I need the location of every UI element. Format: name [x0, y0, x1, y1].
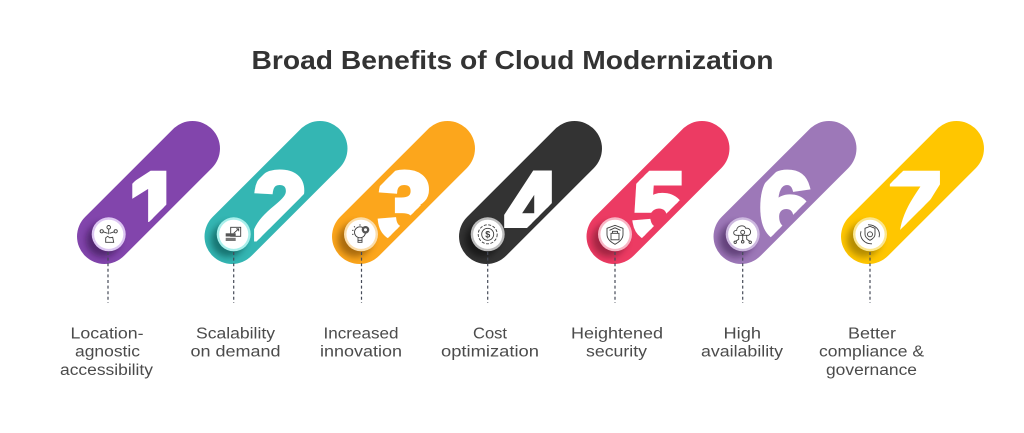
label 6 [701, 326, 783, 361]
icon: light bulb with gear [344, 217, 378, 251]
icon: cloud network [726, 217, 760, 251]
label 4: optimization [441, 344, 539, 361]
panel: 5 heightened security [572, 121, 730, 360]
label 1 [60, 326, 153, 379]
pill shadow 2 [211, 223, 245, 257]
label 1: agnostic [75, 344, 140, 361]
panel: 1 location-agnostic accessibility [60, 121, 220, 378]
panel: 2 scalability on demand [191, 121, 348, 356]
connector 5 [614, 252, 616, 303]
number 1: 1 [128, 153, 182, 260]
icon: dollar gear: $ [485, 230, 490, 240]
panel: 4 cost optimization [442, 121, 602, 360]
label 2: on demand [190, 344, 280, 361]
label 6: High [724, 326, 761, 342]
number 4: 4 [505, 153, 559, 260]
label 1: Location- [70, 326, 144, 342]
pill shadow 3 [338, 223, 372, 257]
pill 5 [575, 110, 741, 275]
title: Broad Benefits of Cloud Modernization [252, 45, 774, 75]
pill shadow 6 [719, 223, 753, 257]
connector 6 [742, 252, 744, 303]
connector 4 [487, 252, 489, 303]
label 2 [190, 326, 280, 361]
pill 6 [702, 110, 868, 275]
pill shadow 1 [86, 223, 120, 257]
icon: target shield [853, 217, 887, 251]
pill shadow 4 [465, 223, 499, 257]
label 7: compliance & [819, 344, 925, 361]
pill shadow 5 [592, 223, 626, 257]
number 7: 7 [888, 153, 942, 260]
pill 4 [448, 110, 613, 275]
label 3: Increased [324, 326, 398, 342]
connector 7 [869, 252, 871, 303]
label 6: availability [701, 344, 783, 361]
number 2: 2 [253, 153, 307, 260]
icon: network hand [92, 217, 126, 251]
panel: 6 high availability [702, 121, 856, 360]
connector 3 [360, 252, 362, 303]
icon: shield with lock [598, 217, 632, 251]
icon: dollar gear [471, 217, 505, 251]
number 6: 6 [759, 153, 813, 260]
label 7 [819, 326, 925, 379]
label 5: security [586, 344, 647, 361]
pill 2 [193, 110, 359, 275]
number 5: 5 [632, 153, 686, 260]
pill 7 [830, 110, 995, 275]
label 5 [571, 326, 663, 361]
label 7: Better [848, 326, 896, 342]
label 7: governance [826, 362, 917, 379]
label 1: accessibility [60, 362, 153, 379]
panel: 3 increased innovation [321, 121, 475, 356]
label 3: innovation [320, 344, 402, 361]
pill 1 [66, 110, 231, 275]
number 3: 3 [378, 153, 432, 260]
panel: 7 better compliance and governance [820, 121, 984, 378]
label 4: Cost [473, 326, 508, 342]
pill shadow 7 [847, 223, 881, 257]
label 3 [320, 326, 402, 361]
label 5: Heightened [571, 326, 663, 342]
label 4 [441, 326, 539, 361]
label 2: Scalability [196, 326, 275, 342]
icon: scaling screens [217, 217, 251, 251]
connector 2 [233, 252, 235, 303]
pill 3 [321, 110, 486, 275]
connector 1 [107, 252, 109, 303]
